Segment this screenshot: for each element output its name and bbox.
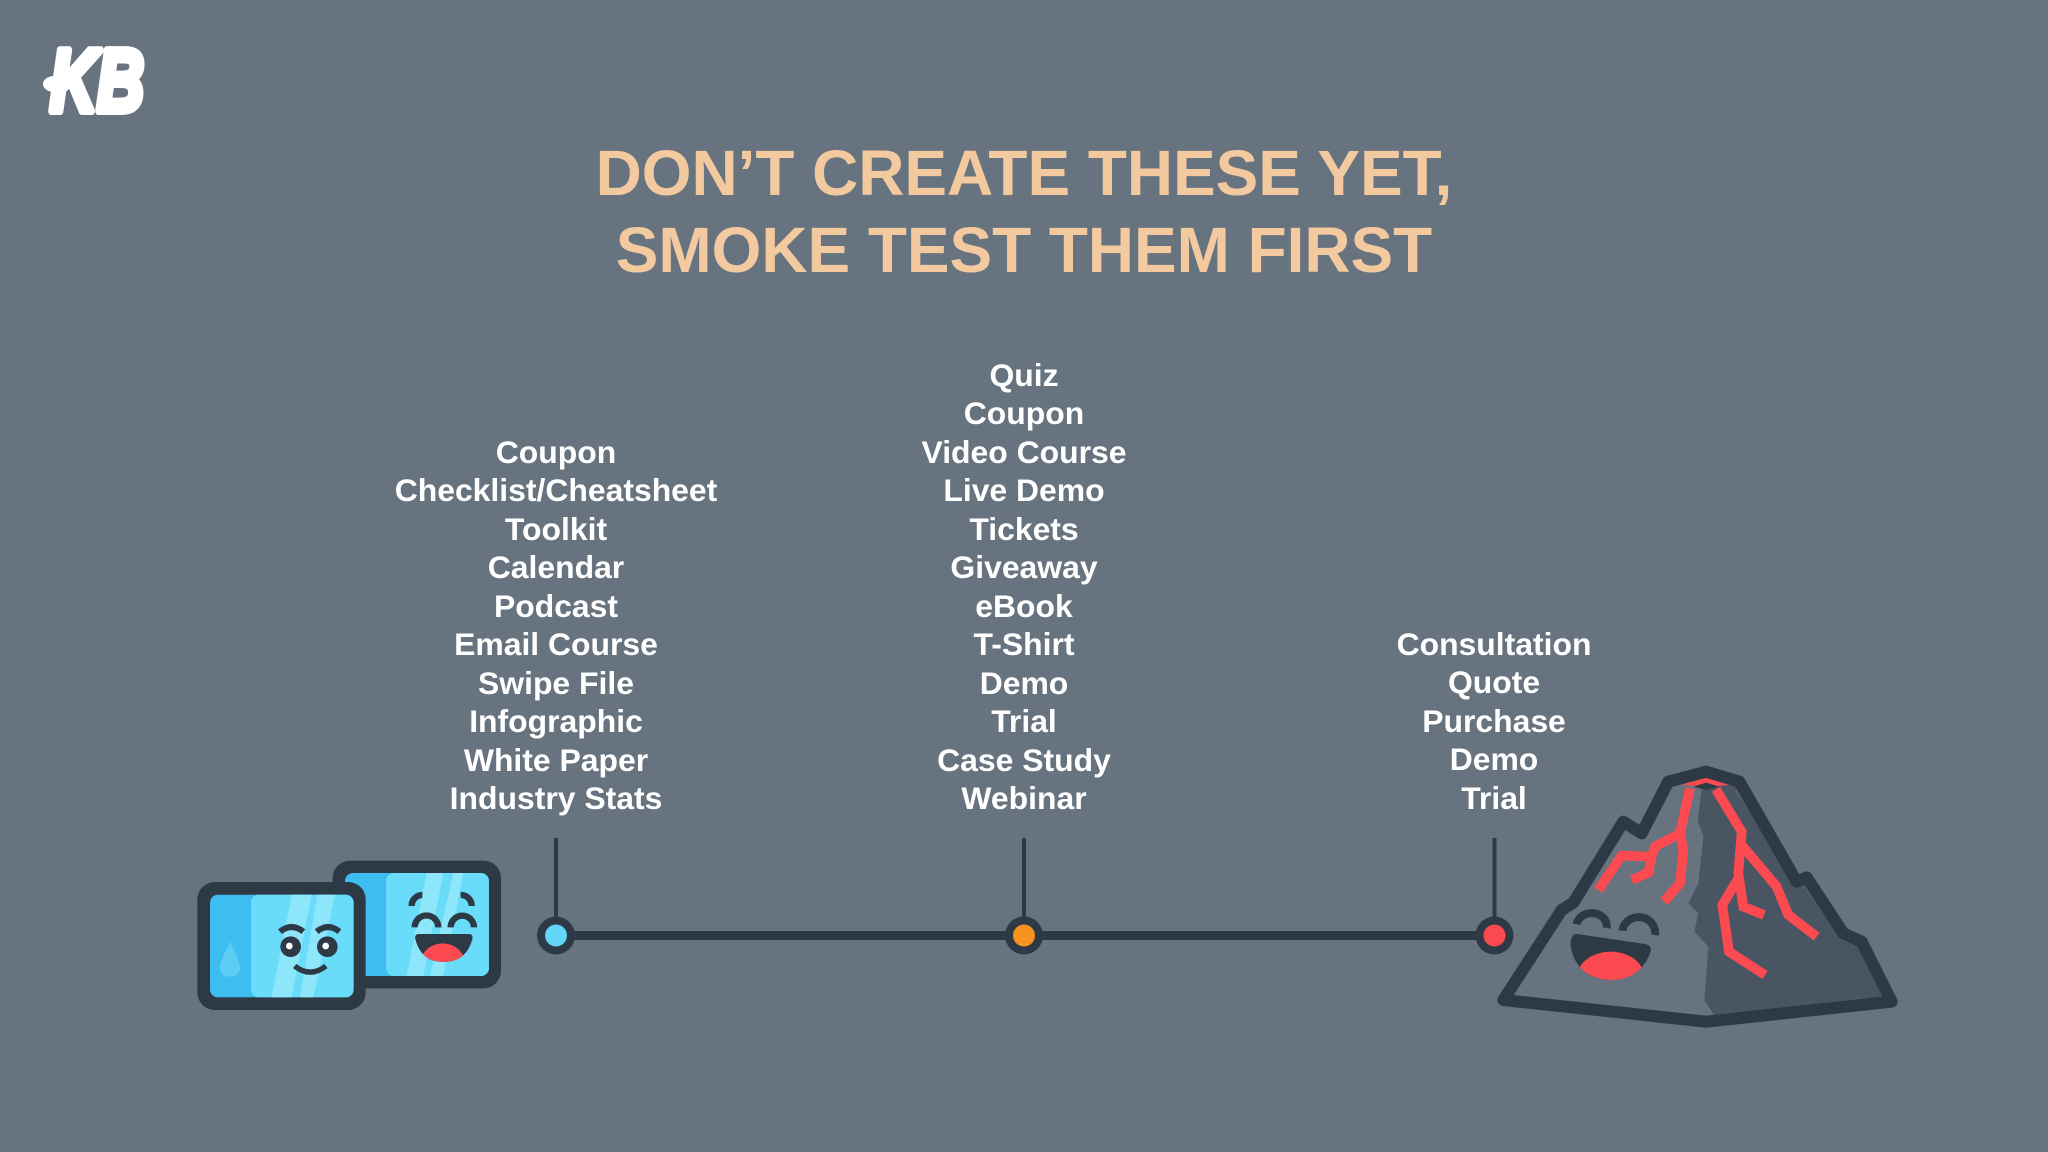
title [596,136,1452,286]
list: middle stage offers: T-Shirt [974,626,1074,662]
list: final stage offers [1397,626,1591,816]
list: final stage offers: Demo [1450,741,1538,777]
stem and node: hot [1476,838,1514,954]
list: middle stage offers: Video Course [922,434,1126,470]
volcano body [1503,772,1892,1022]
list: final stage offers: Trial [1461,780,1527,816]
list: first stage offers: Calendar [488,549,624,585]
front ice cube [197,882,366,1010]
list: first stage offers: Checklist/Cheatsheet [395,472,717,508]
volcano face [1570,909,1660,980]
list: middle stage offers: eBook [975,588,1073,624]
title: DON’T CREATE THESE YET, [596,136,1452,208]
list: first stage offers: Swipe File [478,665,634,701]
list: first stage offers: White Paper [464,742,648,778]
list: middle stage offers: Quiz [989,357,1059,393]
outline [1503,772,1892,1022]
list: first stage offers: Podcast [494,588,618,624]
list: final stage offers: Quote [1448,664,1540,700]
list: middle stage offers: Giveaway [950,549,1098,585]
list: first stage offers: Infographic [469,703,643,739]
logo: KB: KB [50,31,144,130]
list: middle stage offers: Live Demo [943,472,1105,508]
list: middle stage offers: Coupon [964,395,1084,431]
stem and node: warm [1005,838,1043,954]
list: final stage offers: Consultation [1397,626,1591,662]
list: first stage offers: Coupon [496,434,616,470]
lava streams [1598,788,1817,975]
stem and node: cold [537,838,575,954]
list: middle stage offers [922,357,1126,816]
volcano shaded side [1688,782,1888,1017]
list: first stage offers [395,434,717,816]
title: SMOKE TEST THEM FIRST [616,214,1432,286]
list: middle stage offers: Webinar [961,780,1087,816]
crater [1673,777,1736,789]
icon: volcano [1497,766,1898,1028]
list: final stage offers: Purchase [1422,703,1566,739]
list: middle stage offers: Demo [980,665,1068,701]
list: first stage offers: Industry Stats [450,780,662,816]
back ice cube [333,861,501,990]
list: first stage offers: Email Course [454,626,658,662]
icon: ice cubes [197,860,501,1010]
list: middle stage offers: Case Study [937,742,1111,778]
list: middle stage offers: Trial [991,703,1057,739]
list: middle stage offers: Tickets [969,511,1079,547]
list: first stage offers: Toolkit [505,511,607,547]
